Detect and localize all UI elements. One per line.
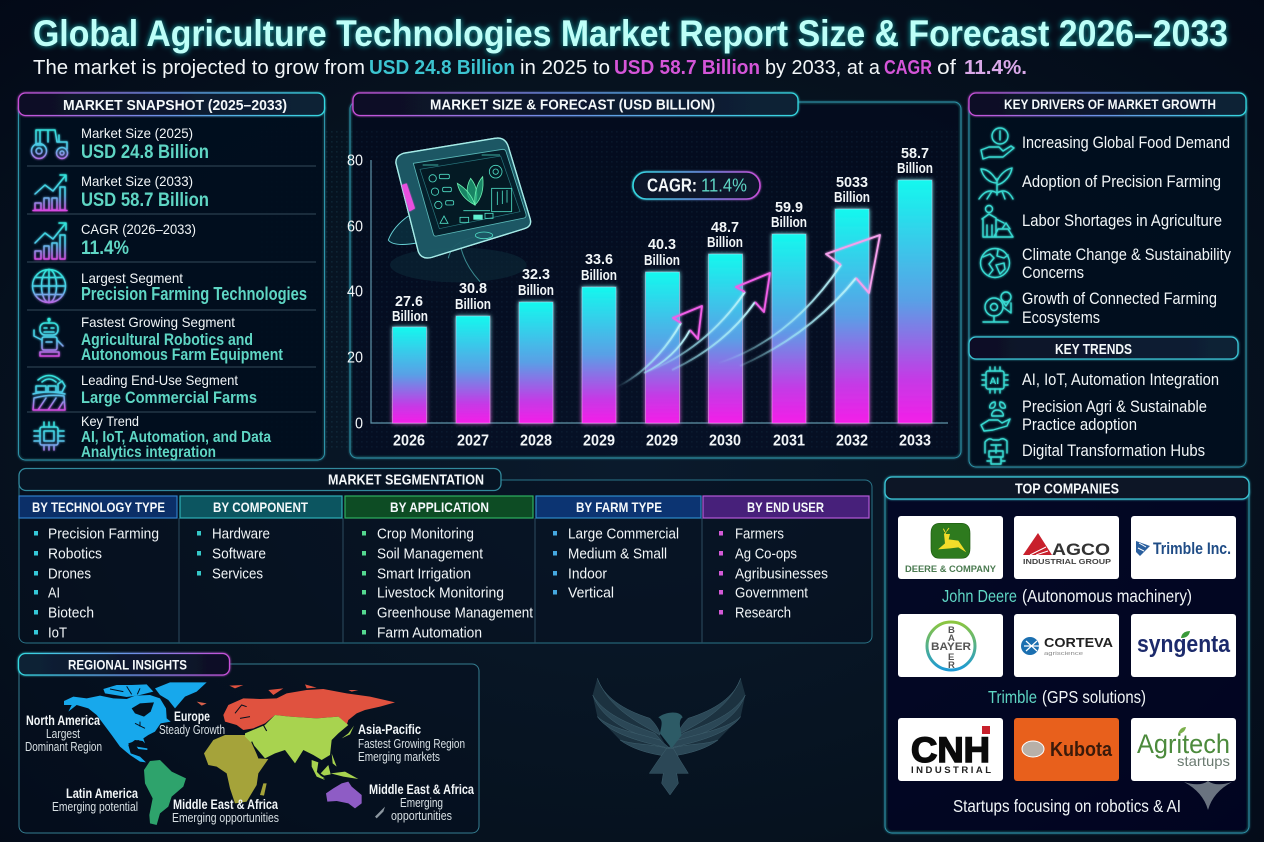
subtitle: by 2033, at a — [765, 57, 881, 79]
column: by technology type: Robotics — [48, 546, 102, 562]
subtitle — [33, 57, 1027, 79]
bar value labels: Billion — [897, 161, 933, 177]
bar value labels: 5033 — [836, 174, 868, 191]
year labels: 2033 — [899, 432, 931, 450]
column: by farm type: Large Commercial — [568, 526, 679, 542]
bar value labels: 59.9 — [775, 199, 803, 216]
bar value labels: Billion — [518, 283, 554, 299]
heading: top companies: TOP COMPANIES — [1015, 482, 1119, 498]
stat: key trend: Analytics integration — [81, 444, 216, 461]
icon: farm tablet — [388, 138, 531, 282]
chart axes: 60 — [347, 218, 363, 236]
logo: Corteva — [1014, 614, 1119, 677]
caption: startups: Startups focusing on robotics & AI — [953, 796, 1181, 816]
heading: market snapshot: MARKET SNAPSHOT (2025–2033) — [63, 98, 287, 114]
label: middle east and africa right: Emerging — [400, 796, 443, 810]
caption: John Deere: (Autonomous machinery) — [1022, 586, 1192, 606]
year labels: 2027 — [457, 432, 489, 450]
year labels: 2031 — [773, 432, 805, 450]
trend: precision agri: Practice adoption — [1022, 415, 1137, 434]
logo: Trimble: Trimble Inc. — [1153, 539, 1231, 558]
year labels: 2030 — [709, 432, 741, 450]
column: by technology type: Drones — [48, 566, 91, 582]
subtitle: USD 24.8 Billion — [369, 57, 515, 79]
column: by technology type: BY TECHNOLOGY TYPE — [32, 499, 165, 515]
logo: Bayer: R — [948, 660, 955, 671]
year labels: 2026 — [393, 432, 425, 450]
label: north america: Largest — [46, 727, 80, 741]
column: by end user — [703, 496, 869, 622]
column: by farm type: BY FARM TYPE — [576, 499, 662, 515]
label: middle east and africa: Middle East & Africa — [173, 797, 278, 812]
subtitle: The market is projected to grow from — [33, 57, 365, 79]
logo: Corteva: CORTEVA — [1044, 635, 1114, 650]
column: by farm type — [536, 496, 701, 602]
driver: climate change: Concerns — [1022, 263, 1084, 282]
logo: Syngenta — [1131, 614, 1236, 677]
chart axes — [347, 152, 948, 432]
callout: CAGR — [633, 172, 760, 199]
column: by technology type: IoT — [48, 624, 67, 642]
label: asia-pacific: Asia-Pacific — [358, 722, 421, 737]
column: by application: Soil Management — [377, 546, 484, 562]
heading: market segmentation — [19, 468, 501, 490]
heading: key trends: KEY TRENDS — [1055, 342, 1132, 358]
bar value labels: 27.6 — [395, 293, 423, 310]
icon: tractor — [32, 130, 68, 158]
bar value labels: Billion — [771, 215, 807, 231]
bar value labels: Billion — [644, 253, 680, 269]
column: by application: Farm Automation — [377, 624, 482, 642]
driver: connected ecosystems: Growth of Connected Farming — [1022, 289, 1217, 308]
label: asia-pacific: Emerging markets — [358, 750, 440, 764]
heading: key trends — [969, 337, 1238, 359]
logo: Deere and Company — [898, 516, 1003, 579]
stat: fastest growing segment — [81, 314, 283, 364]
stat: fastest growing segment: Fastest Growing Segment — [81, 314, 235, 330]
column: by component: BY COMPONENT — [213, 499, 308, 515]
label: middle east and africa right — [369, 782, 474, 823]
label: middle east and africa — [172, 797, 279, 825]
column: by end user: BY END USER — [747, 499, 824, 515]
stat: largest segment — [81, 270, 307, 304]
heading: market segmentation: MARKET SEGMENTATION — [328, 472, 484, 488]
logo: CNH Industrial: INDUSTRIAL — [911, 765, 991, 776]
driver: labor shortages: Labor Shortages in Agriculture — [1022, 211, 1222, 230]
icon: eagle emblem — [593, 678, 745, 795]
stat: key trend: Key Trend — [81, 413, 139, 429]
bar value labels — [392, 145, 933, 325]
icon: digital hub — [985, 439, 1007, 464]
caption: Trimble: Trimble — [988, 687, 1037, 707]
column: by farm type: Medium & Small — [568, 546, 667, 562]
stat: leading end-use segment: Leading End-Use Segment — [81, 372, 238, 388]
logo: Kubota: Kubota — [1050, 739, 1113, 761]
logo: Bayer: BAYER — [931, 641, 971, 653]
label: latin america: Latin America — [66, 786, 138, 801]
column: by component — [180, 496, 342, 582]
year labels — [393, 432, 931, 450]
column: by application: Livestock Monitoring — [377, 584, 504, 602]
stat: largest segment: Largest Segment — [81, 270, 183, 286]
stat: CAGR: 11.4% — [81, 238, 129, 259]
logo: AGCO: AGCO — [1052, 540, 1110, 559]
column: by component: Hardware — [212, 526, 270, 542]
label: europe — [159, 709, 225, 737]
caption: Trimble — [988, 687, 1146, 707]
column: by end user: Farmers — [735, 526, 784, 542]
icon: farm fields — [33, 376, 65, 410]
panel: top companies — [885, 477, 1249, 833]
column: by technology type: Biotech — [48, 604, 94, 622]
heading: key drivers: KEY DRIVERS OF MARKET GROWTH — [1004, 96, 1216, 112]
label: north america — [25, 713, 102, 754]
logo: Bayer: B — [948, 625, 955, 636]
driver: climate change: Climate Change & Sustainability — [1022, 245, 1231, 264]
logo: Corteva: agriscience — [1044, 651, 1083, 657]
trend: digital hubs: Digital Transformation Hubs — [1022, 441, 1205, 460]
stat: market size 2025: Market Size (2025) — [81, 125, 193, 141]
stat: CAGR — [81, 221, 196, 259]
caption: Trimble: (GPS solutions) — [1042, 687, 1146, 707]
logo: AGCO — [1014, 516, 1119, 579]
stat: key trend — [81, 413, 271, 461]
driver: food demand: Increasing Global Food Demand — [1022, 133, 1230, 152]
stat: market size 2025: USD 24.8 Billion — [81, 142, 209, 163]
bar value labels: 58.7 — [901, 145, 929, 162]
column: by end user: Research — [735, 604, 791, 622]
bar value labels: Billion — [455, 297, 491, 313]
panel: market size and forecast — [347, 93, 961, 458]
column: by technology type — [19, 496, 177, 642]
heading: top companies — [885, 477, 1249, 499]
stat: fastest growing segment: Autonomous Farm Equipment — [81, 346, 283, 364]
logo: Agritech startups: startups — [1177, 753, 1230, 769]
icon: processor chip — [34, 422, 64, 450]
year labels: 2029 — [583, 432, 615, 450]
icon: climate globe — [980, 248, 1010, 278]
heading: regional insights — [18, 654, 230, 675]
bar value labels: 30.8 — [459, 280, 487, 297]
year labels: 2029 — [646, 432, 678, 450]
bar value labels: 32.3 — [522, 266, 550, 283]
bar value labels: 33.6 — [585, 251, 613, 268]
driver: climate change — [1022, 245, 1231, 282]
label: north america: Dominant Region — [25, 740, 102, 754]
stat: CAGR: CAGR (2026–2033) — [81, 221, 196, 237]
column: by component: Software — [212, 546, 266, 562]
label: asia-pacific — [358, 722, 465, 764]
heading: regional insights: REGIONAL INSIGHTS — [68, 656, 187, 672]
column: by end user: Agribusinesses — [735, 566, 828, 582]
chart axes: 20 — [347, 350, 363, 366]
column: by application: Crop Monitoring — [377, 526, 474, 542]
bar value labels: 40.3 — [648, 236, 676, 253]
year labels: 2032 — [836, 432, 868, 450]
stat: largest segment: Precision Farming Technologies — [81, 284, 307, 304]
label: latin america — [52, 786, 138, 814]
column: by application: BY APPLICATION — [390, 499, 489, 515]
stat: fastest growing segment: Agricultural Robotics and — [81, 331, 253, 349]
column: by application: Smart Irrigation — [377, 566, 471, 582]
logo: Trimble — [1131, 516, 1236, 579]
stat: market size 2025 — [81, 125, 209, 163]
caption: John Deere: John Deere — [942, 586, 1017, 606]
stat: leading end-use segment — [81, 372, 257, 407]
icon: hand with seedling — [981, 402, 1010, 431]
column: by end user: Government — [735, 584, 809, 602]
callout: CAGR: 11.4% — [701, 176, 747, 196]
panel: regional insights — [18, 654, 479, 833]
callout: CAGR: CAGR: — [647, 176, 697, 196]
icon: hand with food — [981, 128, 1014, 159]
subtitle: 11.4%. — [964, 57, 1027, 79]
stat: market size 2033 — [81, 173, 209, 211]
bar value labels: Billion — [581, 268, 617, 284]
stat: key trend: AI, IoT, Automation, and Data — [81, 429, 271, 446]
column: by application: Greenhouse Management — [377, 604, 534, 622]
logo: Agritech startups — [1131, 718, 1236, 781]
logo: CNH Industrial: CNH — [911, 731, 990, 770]
subtitle: in 2025 to — [520, 57, 610, 79]
icon: farm labor — [982, 206, 1013, 237]
heading: key drivers — [969, 93, 1246, 116]
chart axes: 0 — [355, 416, 363, 432]
column: by end user: Ag Co-ops — [735, 546, 797, 562]
subtitle: USD 58.7 Billion — [614, 57, 760, 79]
logo: CNH Industrial — [898, 718, 1003, 781]
column: by technology type: AI — [48, 584, 60, 602]
bar value labels: 48.7 — [711, 219, 739, 236]
caption: John Deere — [942, 586, 1192, 606]
logo: Bayer — [898, 614, 1003, 677]
icon: plant with sensors — [979, 168, 1013, 199]
icon: AI chip — [982, 367, 1008, 393]
trend: precision agri — [1022, 397, 1207, 434]
chart axes: 80 — [347, 152, 363, 170]
subtitle: CAGR — [884, 57, 932, 79]
label: middle east and africa right: opportunities — [391, 809, 452, 823]
subtitle: of — [937, 57, 956, 79]
panel: key drivers and trends — [969, 93, 1246, 467]
bar value labels: Billion — [834, 190, 870, 206]
label: europe: Steady Growth — [159, 723, 225, 737]
chart axes: 40 — [347, 284, 363, 300]
icon: CAGR chart — [35, 223, 66, 259]
icon: globe — [32, 270, 66, 302]
label: asia-pacific: Fastest Growing Region — [358, 737, 465, 751]
heading: market snapshot — [18, 93, 324, 116]
driver: connected ecosystems — [1022, 289, 1217, 327]
logo: AGCO: INDUSTRIAL GROUP — [1023, 557, 1111, 566]
label: latin america: Emerging potential — [52, 800, 138, 814]
logo: Kubota — [1014, 718, 1119, 781]
icon: robot — [34, 318, 63, 356]
bar value labels: Billion — [707, 235, 743, 251]
icon: sparkle — [1184, 781, 1232, 810]
label: north america: North America — [26, 713, 100, 728]
column: by farm type: Vertical — [568, 584, 614, 602]
year labels: 2028 — [520, 432, 552, 450]
icon: AI chip: AI — [990, 376, 999, 387]
bar value labels: Billion — [392, 309, 428, 325]
column: by component: Services — [212, 566, 263, 582]
logo: Agritech startups: Agritech — [1137, 729, 1230, 759]
stat: market size 2033: USD 58.7 Billion — [81, 190, 209, 211]
column: by application — [345, 496, 534, 642]
trend: AI and IoT: AI, IoT, Automation Integration — [1022, 370, 1219, 389]
column: by farm type: Indoor — [568, 566, 607, 582]
panel: market segmentation — [19, 468, 872, 643]
heading: market size and forecast — [353, 93, 798, 116]
stat: market size 2033: Market Size (2033) — [81, 173, 193, 189]
logo: Bayer: A — [948, 633, 955, 644]
column: by technology type: Precision Farming — [48, 526, 159, 542]
label: europe: Europe — [174, 709, 210, 724]
arrows: growth trend — [617, 235, 880, 387]
heading: market size and forecast: MARKET SIZE & FORECAST (USD BILLION) — [430, 98, 715, 114]
logo: Syngenta: syngenta — [1137, 631, 1231, 658]
label: middle east and africa: Emerging opportunities — [172, 811, 279, 825]
logo: Deere and Company: DEERE & COMPANY — [905, 564, 997, 575]
icon: connected farm — [983, 292, 1011, 322]
trend: precision agri: Precision Agri & Sustainable — [1022, 397, 1207, 416]
world map — [64, 682, 395, 825]
stat: leading end-use segment: Large Commercial Farms — [81, 388, 257, 407]
label: middle east and africa right: Middle East & Africa — [369, 782, 474, 797]
bar chart — [392, 145, 933, 450]
icon: growth chart — [33, 175, 67, 210]
panel: market snapshot — [18, 93, 324, 461]
logo: Bayer: E — [948, 652, 954, 663]
driver: connected ecosystems: Ecosystems — [1022, 308, 1100, 327]
driver: precision farming: Adoption of Precision Farming — [1022, 172, 1221, 191]
